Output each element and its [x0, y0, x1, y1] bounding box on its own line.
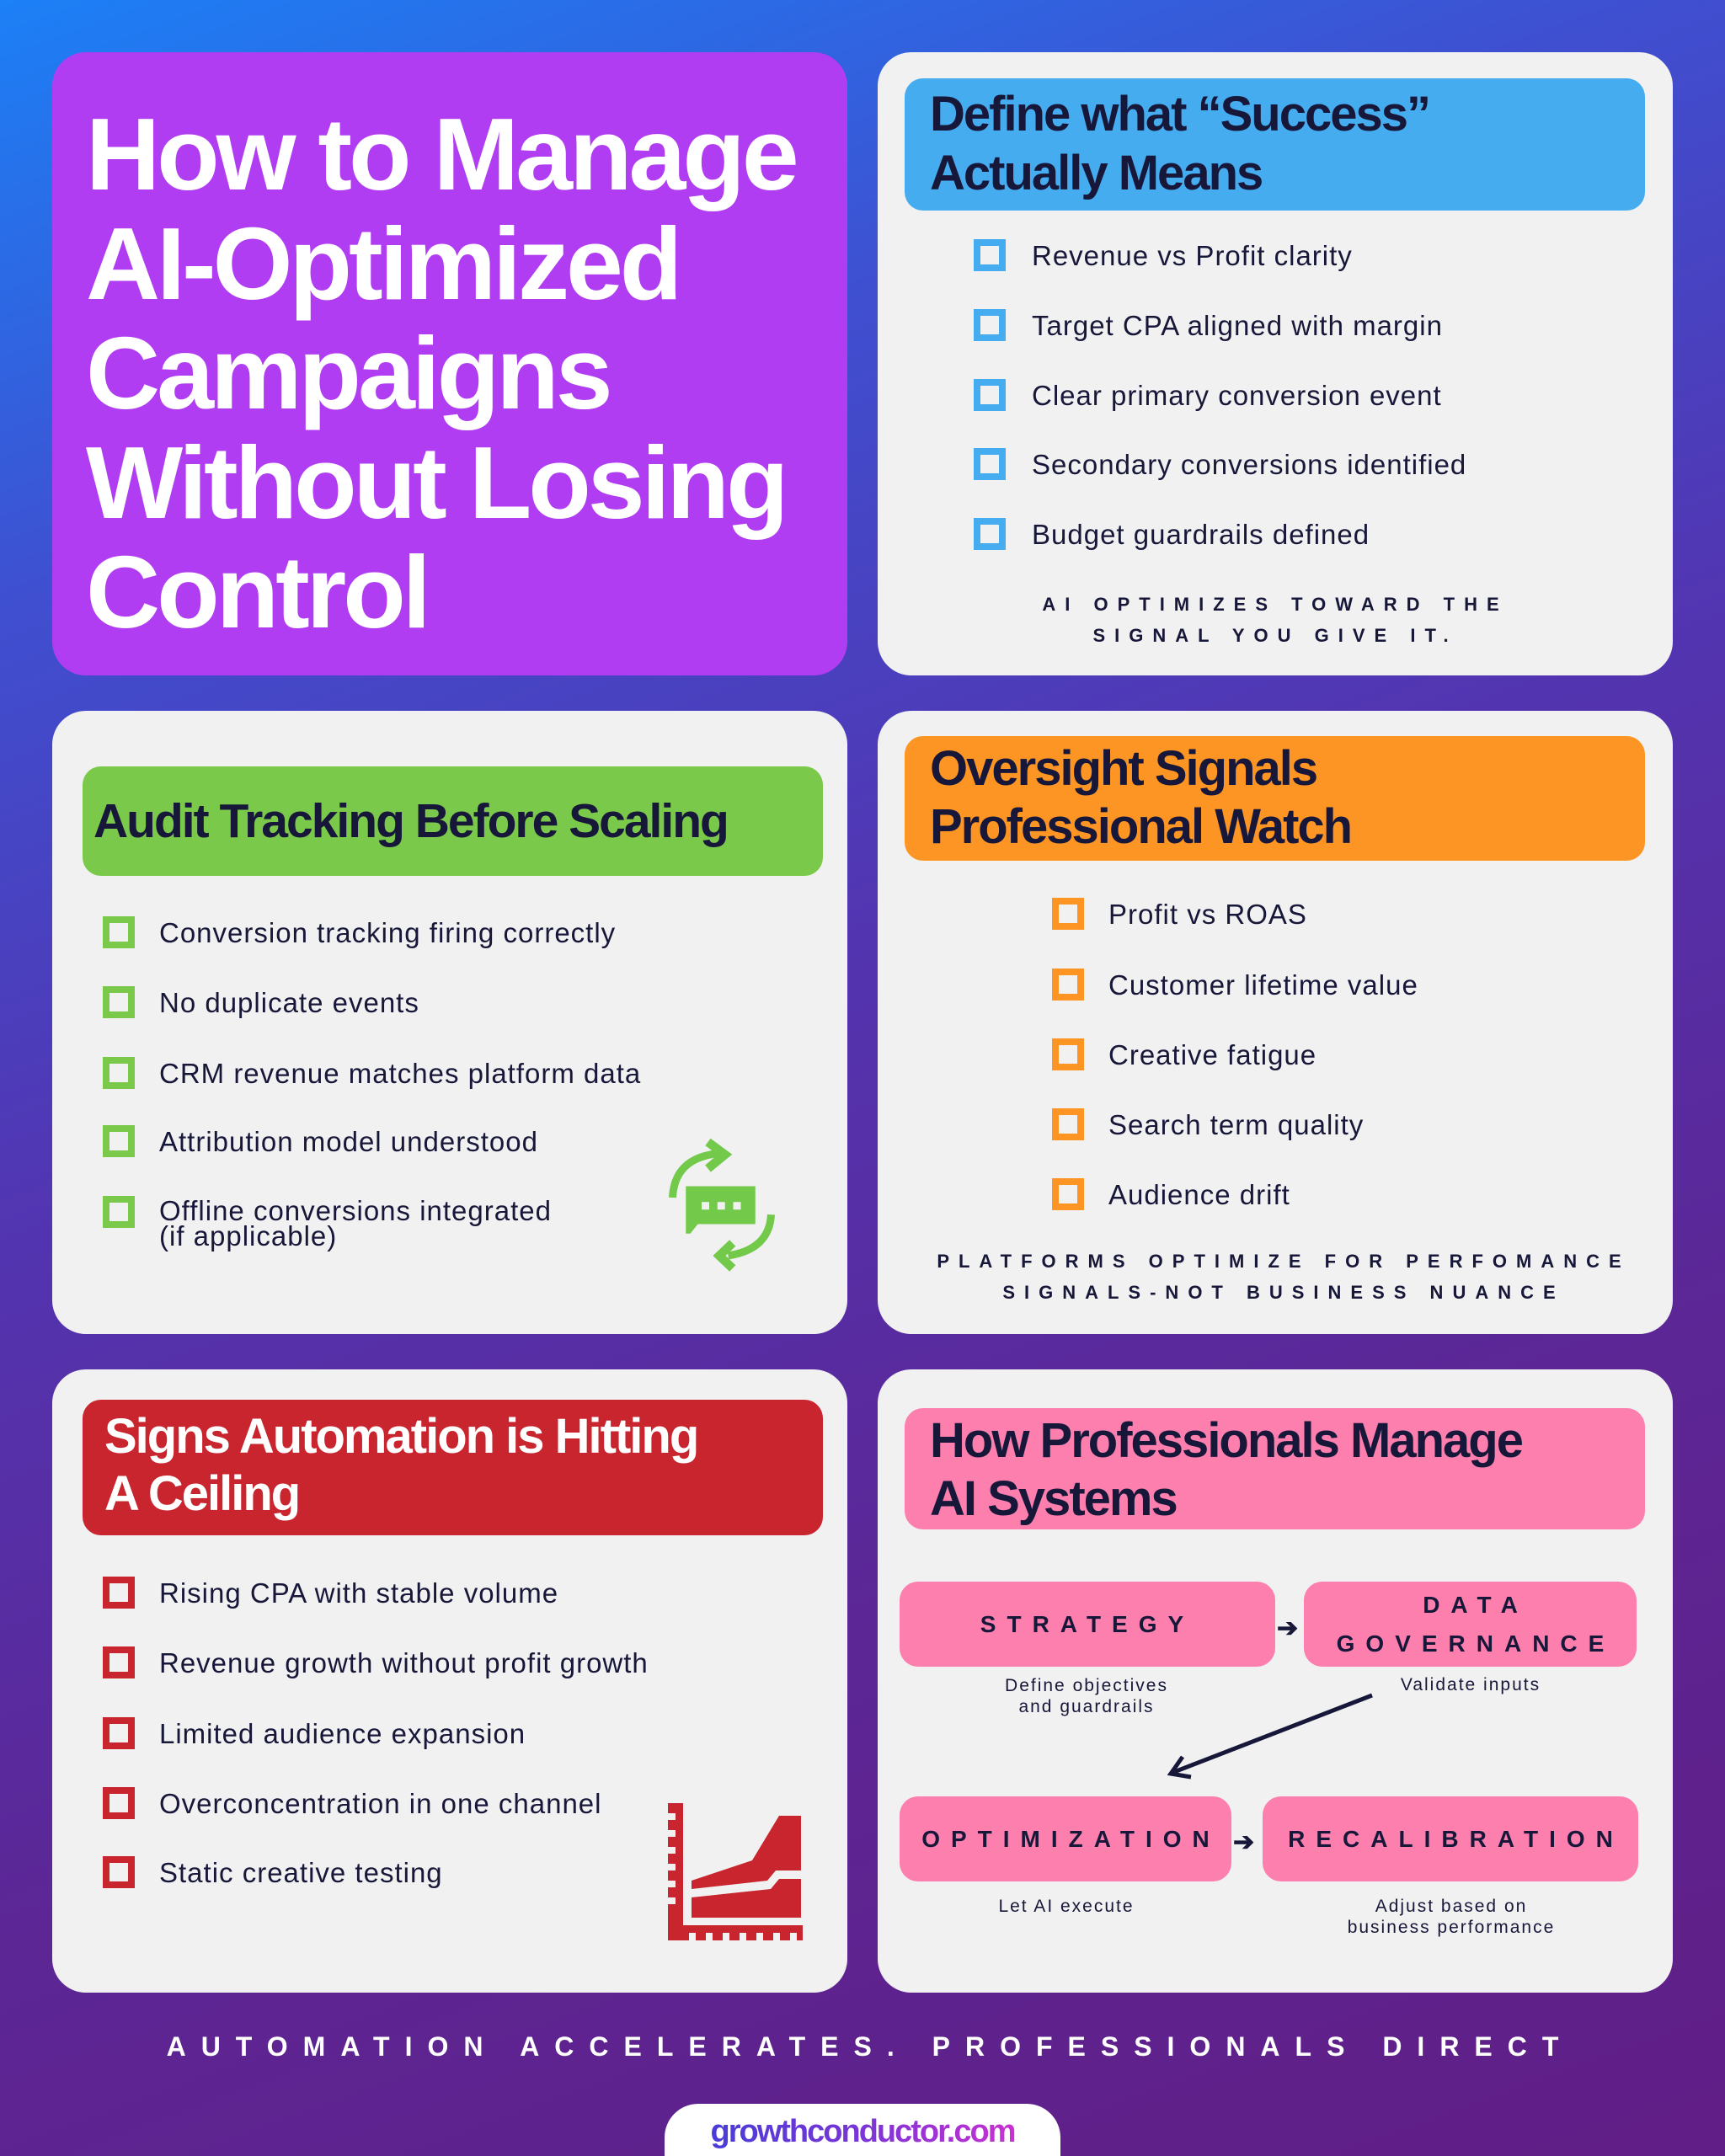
checklist: ceiling: Static creative testing [159, 1857, 443, 1888]
heading: oversight: Oversight Signals [930, 741, 1316, 796]
checklist: audit: Offline conversions integrated [159, 1195, 552, 1226]
flow: optimization: OPTIMIZATION [921, 1826, 1220, 1851]
heading: define success: Define what “Success” [930, 87, 1429, 141]
heading: ceiling: A Ceiling [104, 1466, 299, 1521]
arrow: diagonal [1167, 1693, 1373, 1779]
checklist: success: Revenue vs Profit clarity [1032, 240, 1353, 271]
panel: oversight signals [878, 711, 1673, 1334]
checklist: audit: Attribution model understood [159, 1126, 538, 1157]
flow: optimization [900, 1796, 1231, 1881]
panel: how professionals manage [878, 1369, 1673, 1993]
checklist: audit: (if applicable) [159, 1220, 337, 1251]
heading: ceiling: Signs Automation is Hitting [104, 1409, 697, 1464]
title: Without Losing [86, 425, 786, 540]
checklist: oversight [1052, 898, 1418, 1210]
heading: ceiling [83, 1400, 823, 1535]
caption: strategy: and guardrails [1018, 1697, 1155, 1716]
caption: data: Validate inputs [1401, 1675, 1541, 1694]
panel: title [52, 52, 847, 675]
checklist: ceiling: Rising CPA with stable volume [159, 1577, 558, 1609]
checklist: ceiling: Overconcentration in one channel [159, 1788, 601, 1819]
title [86, 97, 796, 649]
flow: data governance [1304, 1582, 1637, 1667]
caption: optimization: Let AI execute [998, 1897, 1135, 1916]
title: Control [86, 535, 428, 649]
flow: strategy [900, 1582, 1275, 1667]
checklist: oversight: Customer lifetime value [1108, 969, 1418, 1001]
panel: audit tracking [52, 711, 847, 1334]
checklist: oversight: Creative fatigue [1108, 1039, 1316, 1070]
checklist: success: Clear primary conversion event [1032, 380, 1442, 411]
heading: professionals: AI Systems [930, 1471, 1177, 1526]
tagline: SIGNALS-NOT BUSINESS NUANCE [1002, 1282, 1565, 1303]
checklist: success: Target CPA aligned with margin [1032, 310, 1443, 341]
panel: automation ceiling [52, 1369, 847, 1993]
footer logo [665, 2104, 1060, 2156]
caption: strategy [1005, 1676, 1168, 1716]
tagline: PLATFORMS OPTIMIZE FOR PERFOMANCE [937, 1251, 1631, 1272]
checklist: oversight: Profit vs ROAS [1108, 899, 1307, 930]
heading: audit tracking [83, 766, 823, 876]
checklist: audit [103, 916, 641, 1251]
tagline: AI OPTIMIZES TOWARD THE [1042, 594, 1509, 615]
caption: recalibration: business performance [1348, 1918, 1555, 1937]
panel: define success [878, 52, 1673, 675]
checklist: success: Secondary conversions identified [1032, 449, 1466, 480]
title: AI-Optimized [86, 206, 679, 321]
tagline [1042, 594, 1509, 646]
checklist: success: Budget guardrails defined [1032, 519, 1370, 550]
title: How to Manage [86, 97, 796, 211]
heading: define success [905, 78, 1645, 211]
tagline [937, 1251, 1631, 1303]
caption: strategy: Define objectives [1005, 1676, 1168, 1695]
heading: oversight [905, 736, 1645, 861]
checklist: ceiling: Revenue growth without profit growth [159, 1647, 649, 1678]
arrow: optimization to recalibration: ➔ [1233, 1828, 1254, 1856]
checklist: success [974, 239, 1466, 550]
flow: data governance: GOVERNANCE [1337, 1630, 1615, 1656]
heading: professionals: How Professionals Manage [930, 1413, 1522, 1468]
footer tagline: AUTOMATION ACCELERATES. PROFESSIONALS DIRECT [167, 2031, 1573, 2062]
checklist: ceiling [103, 1577, 649, 1888]
footer logo: growthconductor.com [711, 2114, 1014, 2149]
checklist: oversight: Search term quality [1108, 1109, 1364, 1140]
heading: oversight: Professional Watch [930, 799, 1351, 854]
checklist: ceiling: Limited audience expansion [159, 1718, 526, 1749]
heading: define success: Actually Means [930, 146, 1262, 200]
arrow: strategy to data: ➔ [1277, 1614, 1298, 1642]
flow: recalibration [1263, 1796, 1638, 1881]
checklist: audit: No duplicate events [159, 987, 419, 1018]
checklist: audit: Conversion tracking firing correctly [159, 917, 616, 948]
icon: area chart [668, 1803, 803, 1940]
title: Campaigns [86, 316, 610, 430]
caption: recalibration: Adjust based on [1375, 1897, 1527, 1916]
caption: recalibration [1348, 1897, 1555, 1937]
flow: data governance: DATA [1423, 1592, 1529, 1617]
heading: professionals [905, 1408, 1645, 1529]
flow: strategy: STRATEGY [980, 1610, 1194, 1637]
icon: chat sync [669, 1139, 775, 1272]
checklist: audit: CRM revenue matches platform data [159, 1058, 641, 1089]
heading: audit tracking: Audit Tracking Before Scaling [93, 794, 728, 848]
checklist: oversight: Audience drift [1108, 1179, 1290, 1210]
tagline: SIGNAL YOU GIVE IT. [1092, 625, 1458, 646]
flow: recalibration: RECALIBRATION [1288, 1826, 1624, 1851]
